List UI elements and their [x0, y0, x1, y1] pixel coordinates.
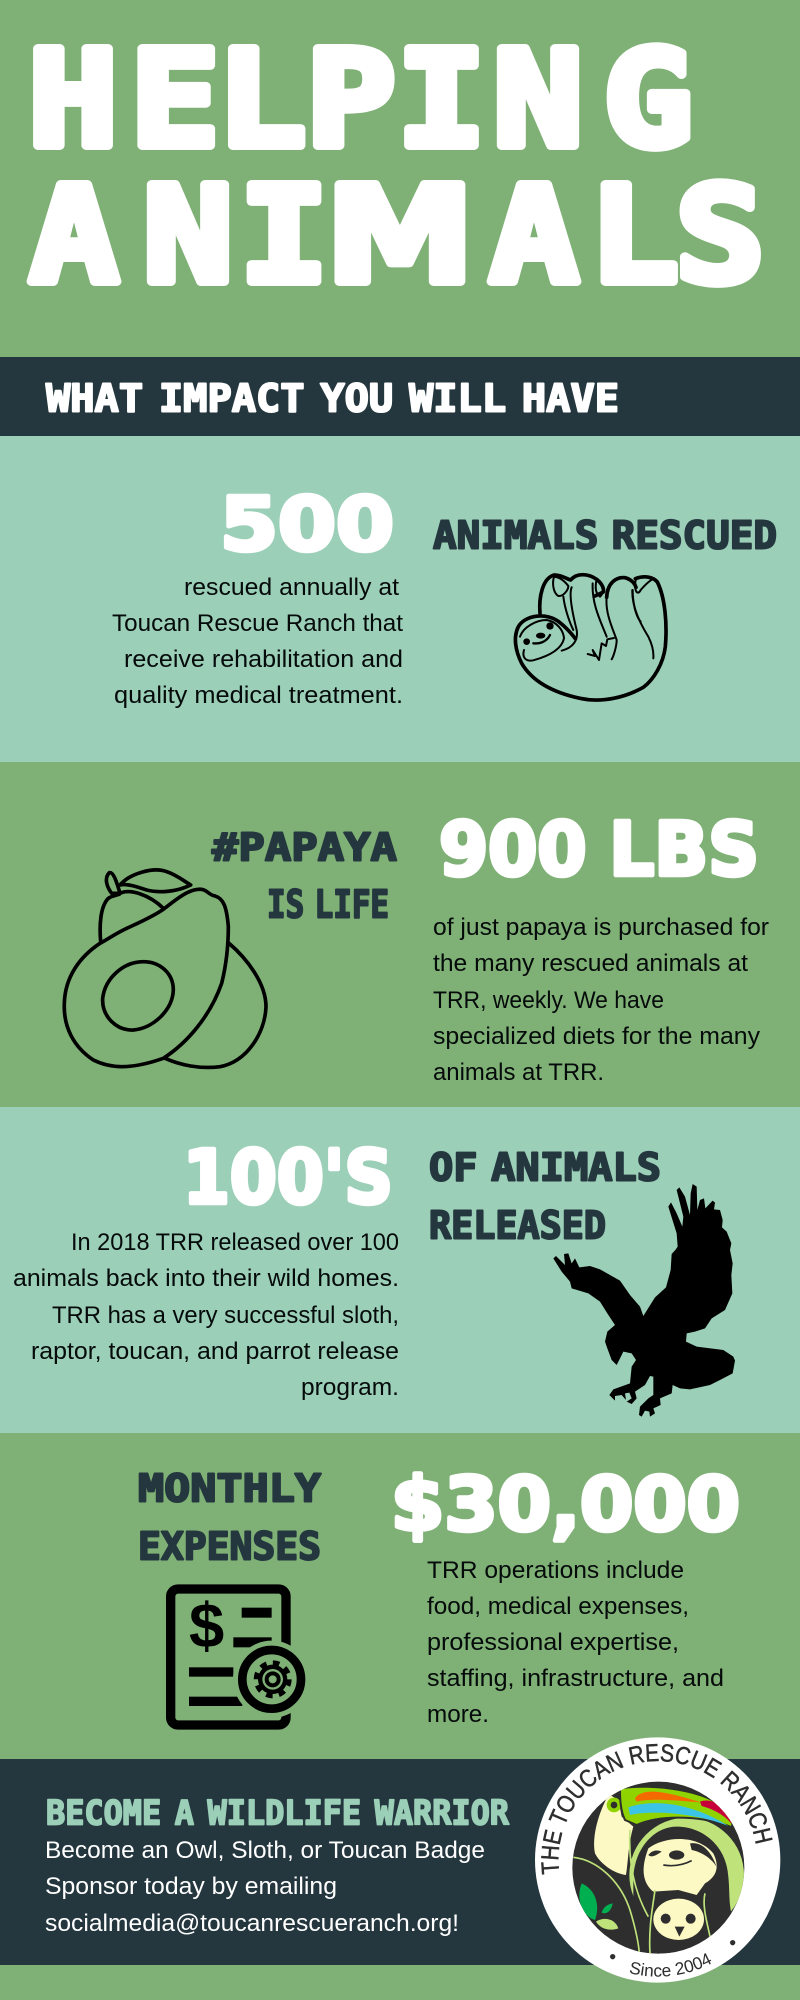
- panel: animals rescued: [0, 436, 800, 762]
- heading: monthly expenses: [138, 1466, 321, 1568]
- text: released description: raptor, toucan, and parrot release: [31, 1338, 399, 1365]
- heading: become a wildlife warrior: BECOME A WILDLIFE WARRIOR: [46, 1794, 509, 1834]
- text: expenses description: more.: [427, 1701, 489, 1728]
- text: papaya description: [433, 914, 769, 1086]
- title: ANI: [29, 159, 329, 314]
- heading: what impact you will have: WHAT IMPACT YOU WILL HAVE: [46, 376, 619, 420]
- text: papaya description: animals at TRR.: [433, 1059, 604, 1086]
- heading: of animals released: [429, 1146, 661, 1248]
- heading: papaya is life: IS LIFE: [267, 882, 389, 926]
- stat: 900 lbs: 900 LBS: [439, 807, 759, 893]
- heading: animals rescued: ANIMALS RESCUED: [433, 514, 777, 558]
- heading: of animals released: RELEASED: [429, 1204, 606, 1248]
- logo since text: Since 2004: [630, 1953, 712, 1977]
- icon: eagle silhouette: [553, 1184, 735, 1417]
- text: expenses description: TRR operations include: [427, 1557, 684, 1584]
- text: released description: TRR has a very successful sloth,: [52, 1302, 399, 1329]
- logo: the toucan rescue ranch: [535, 1737, 780, 1983]
- icon: invoice with gear: $: [189, 1591, 224, 1661]
- heading: monthly expenses: EXPENSES: [138, 1524, 321, 1568]
- text: expenses description: professional expertise,: [427, 1629, 679, 1656]
- title: [28, 23, 765, 314]
- text: papaya description: TRR, weekly. We have: [433, 987, 664, 1014]
- text: released description: [13, 1229, 399, 1401]
- text: papaya description: the many rescued animals at: [433, 950, 748, 977]
- text: papaya description: of just papaya is purchased for: [433, 914, 769, 941]
- stat: $30,000: $30,000: [391, 1462, 740, 1548]
- title: M: [326, 159, 474, 314]
- heading: papaya is life: #PAPAYA: [212, 826, 397, 870]
- heading: of animals released: OF ANIMALS: [429, 1146, 661, 1190]
- text: expenses description: staffing, infrastructure, and: [427, 1665, 724, 1692]
- title: HELPING: [28, 23, 693, 178]
- stat: 500: 500: [220, 482, 394, 568]
- text: rescued description: rescued annually at: [184, 574, 399, 601]
- text: released description: animals back into their wild homes.: [13, 1265, 399, 1292]
- text: expenses description: [427, 1557, 724, 1728]
- text: sponsor call to action: [45, 1837, 485, 1937]
- title: ALS: [489, 159, 765, 314]
- heading: monthly expenses: MONTHLY: [138, 1466, 321, 1510]
- text: rescued description: receive rehabilitation and: [124, 646, 403, 673]
- text: sponsor call to action: Become an Owl, Sloth, or Toucan Badge: [45, 1837, 485, 1864]
- icon: papaya fruit: [64, 870, 266, 1067]
- panel: monthly expenses: [138, 1462, 740, 1728]
- logo ring text: THE TOUCAN RESCUE RANCH: [541, 1744, 773, 1875]
- icon: sloth: [515, 575, 666, 700]
- text: rescued description: [112, 574, 403, 709]
- text: sponsor call to action: Sponsor today by emailing: [45, 1873, 337, 1900]
- heading: papaya is life: [212, 826, 397, 926]
- panel: section banner: [0, 357, 800, 436]
- text: rescued description: Toucan Rescue Ranch that: [112, 610, 403, 637]
- text: released description: In 2018 TRR released over 100: [71, 1229, 399, 1256]
- panel: animals released: [0, 1107, 800, 1433]
- text: rescued description: quality medical treatment.: [114, 682, 403, 709]
- panel: call to action footer: [0, 1759, 800, 1965]
- text: sponsor call to action: socialmedia@toucanrescueranch.org!: [45, 1910, 459, 1937]
- stat: 100's: 100'S: [183, 1135, 393, 1221]
- text: papaya description: specialized diets for the many: [433, 1023, 760, 1050]
- icon: invoice with gear: [171, 1589, 310, 1725]
- text: released description: program.: [301, 1374, 399, 1401]
- text: expenses description: food, medical expenses,: [427, 1593, 689, 1620]
- panel: papaya: [64, 807, 769, 1086]
